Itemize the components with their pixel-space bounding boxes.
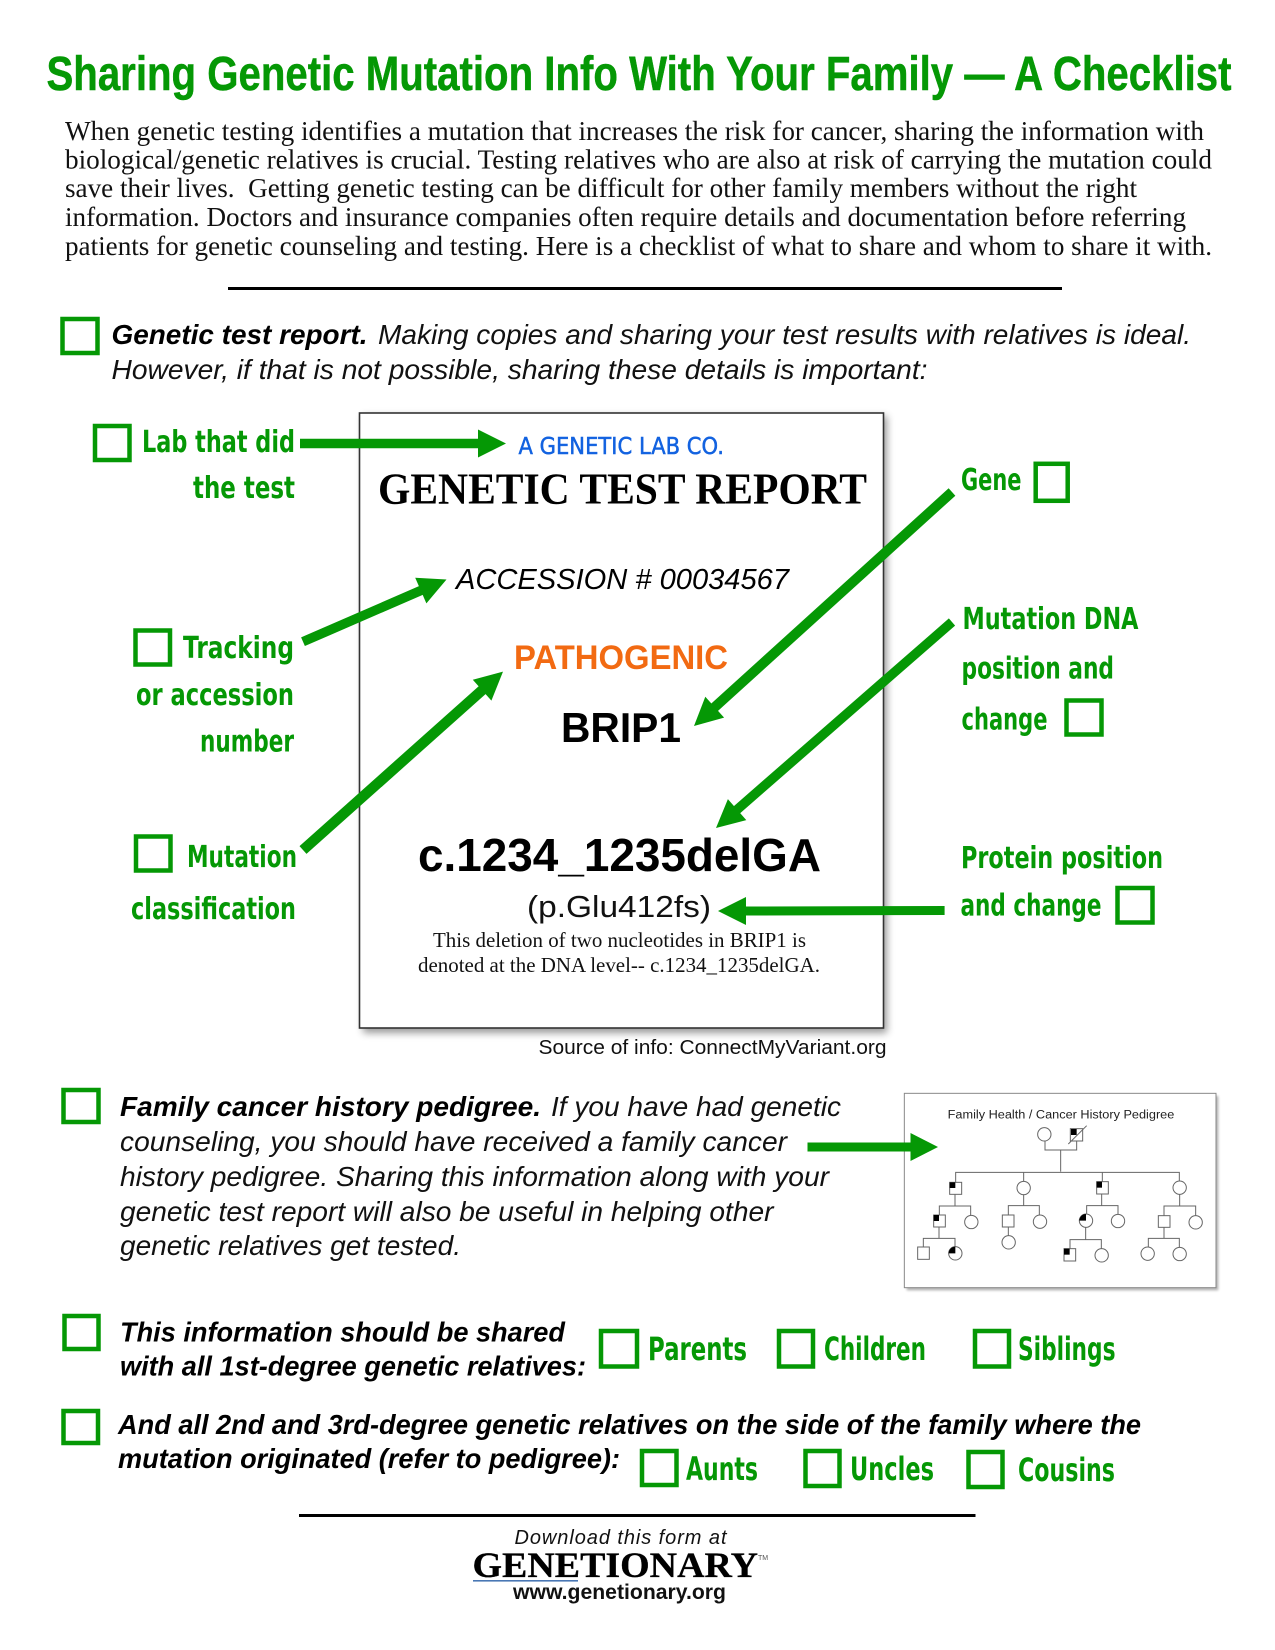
intro paragraph: save their lives. Getting genetic testing can be difficult for other family members without the right — [65, 173, 1137, 203]
checklist item: first-degree relatives — [64, 1316, 1116, 1382]
label: mutation DNA position and change: Mutation DNA — [962, 602, 1139, 637]
text: pedigree: genetic test report will also be useful in helping other — [120, 1196, 775, 1227]
label: mutation classification — [131, 836, 297, 927]
label: mutation classification: Mutation — [187, 840, 297, 875]
text: pedigree: history pedigree. Sharing this information along with your — [120, 1161, 831, 1192]
arrow: DNA change — [716, 622, 952, 828]
arrow: gene — [694, 492, 952, 726]
checkbox: second-degree — [64, 1411, 98, 1443]
intro paragraph: When genetic testing identifies a mutation that increases the risk for cancer, sharing the information with — [65, 116, 1204, 146]
label: tracking or accession number: Tracking — [183, 631, 294, 666]
option: siblings: Siblings — [1018, 1330, 1116, 1368]
text: second-degree — [117, 1409, 1141, 1474]
gene name: BRIP1 — [561, 704, 681, 751]
arrow: protein — [718, 897, 945, 925]
checkbox: pedigree — [64, 1090, 98, 1122]
option: aunts: Aunts — [686, 1450, 758, 1488]
footer: TM — [758, 1555, 768, 1562]
option: cousins: Cousins — [1018, 1451, 1115, 1489]
text: second-degree: And all 2nd and 3rd-degree genetic relatives on the side of the family where the — [117, 1409, 1141, 1440]
logo wordmark: GENETIONARY — [472, 1545, 758, 1585]
label: gene: Gene — [961, 463, 1022, 498]
report heading: GENETIC TEST REPORT — [378, 464, 867, 514]
panel: sample genetic test report — [360, 413, 887, 1033]
label: tracking or accession number: or accession — [136, 678, 294, 713]
text: pedigree — [120, 1091, 841, 1261]
intro paragraph — [65, 116, 1212, 261]
text: pedigree: Family cancer history pedigree. — [120, 1091, 541, 1122]
arrow: classification — [303, 672, 503, 850]
checklist item: second and third-degree relatives — [64, 1409, 1141, 1489]
text: genetic test report: However, if that is not possible, sharing these details is important: — [112, 354, 927, 385]
text: second-degree: mutation originated (refer to pedigree): — [118, 1443, 620, 1474]
arrow: lab — [300, 430, 506, 458]
option: children — [779, 1330, 926, 1368]
label: protein position and change — [960, 841, 1163, 924]
text: pedigree: counseling, you should have received a family cancer — [120, 1126, 789, 1157]
label: mutation DNA position and change — [962, 602, 1139, 738]
text: genetic test report: Making copies and sharing your test results with relatives is ideal. — [378, 319, 1191, 350]
label: mutation DNA position and change: position and — [962, 652, 1114, 686]
intro paragraph: information. Doctors and insurance companies often require details and documentation before referring — [65, 202, 1186, 232]
option: uncles: Uncles — [850, 1450, 934, 1488]
label: protein position and change: Protein position — [961, 841, 1163, 876]
intro paragraph: biological/genetic relatives is crucial. Testing relatives who are also at risk of carrying the mutation could — [65, 144, 1212, 174]
label: lab that did the test — [95, 425, 295, 506]
option: aunts — [642, 1450, 758, 1488]
footer — [472, 1527, 768, 1604]
text: first-degree: This information should be shared — [120, 1316, 566, 1348]
text: pedigree: genetic relatives get tested. — [120, 1230, 461, 1261]
classification: PATHOGENIC — [514, 639, 728, 677]
arrow: pedigree — [808, 1133, 938, 1161]
explanation: This deletion of two nucleotides in BRIP1 is — [433, 928, 806, 952]
label: tracking or accession number — [136, 630, 294, 760]
chart title: Family Health / Cancer History Pedigree — [948, 1108, 1175, 1122]
label: tracking or accession number: number — [200, 724, 294, 760]
checklist item: genetic test report — [62, 319, 1191, 385]
protein change: (p.Glu412fs) — [527, 889, 711, 924]
explanation: denoted at the DNA level-- c.1234_1235delGA. — [418, 953, 820, 977]
panel: pedigree chart — [904, 1093, 1218, 1290]
text: first-degree — [120, 1316, 586, 1382]
label: mutation DNA position and change: change — [962, 702, 1048, 738]
label: mutation classification: classification — [131, 892, 296, 927]
accession number: ACCESSION # 00034567 — [454, 564, 791, 596]
text: genetic test report — [112, 319, 1191, 385]
text: pedigree: If you have had genetic — [551, 1091, 841, 1122]
option: parents: Parents — [648, 1330, 747, 1368]
checkbox: first-degree — [64, 1316, 98, 1349]
option: uncles — [806, 1450, 934, 1488]
arrow: tracking — [303, 578, 446, 642]
DNA change: c.1234_1235delGA — [418, 829, 821, 881]
text: first-degree: with all 1st-degree genetic relatives: — [120, 1350, 586, 1382]
label: protein position and change: and change — [960, 888, 1102, 924]
label: lab that did the test: Lab that did — [142, 425, 295, 460]
option: siblings — [975, 1330, 1116, 1368]
option: parents — [601, 1330, 747, 1368]
lab name: A GENETIC LAB CO. — [518, 434, 724, 460]
checklist item: family cancer history pedigree — [64, 1090, 841, 1261]
explanation — [418, 928, 820, 977]
label: lab that did the test: the test — [193, 471, 295, 506]
source note: Source of info: ConnectMyVariant.org — [538, 1036, 886, 1059]
option: cousins — [968, 1451, 1115, 1489]
download note: Download this form at — [514, 1527, 728, 1549]
option: children: Children — [824, 1330, 926, 1368]
website: www.genetionary.org — [512, 1581, 726, 1604]
intro paragraph: patients for genetic counseling and testing. Here is a checklist of what to share and whom to share it with. — [65, 231, 1212, 261]
checkbox: genetic test report — [62, 319, 98, 353]
text: genetic test report: Genetic test report. — [112, 319, 368, 350]
